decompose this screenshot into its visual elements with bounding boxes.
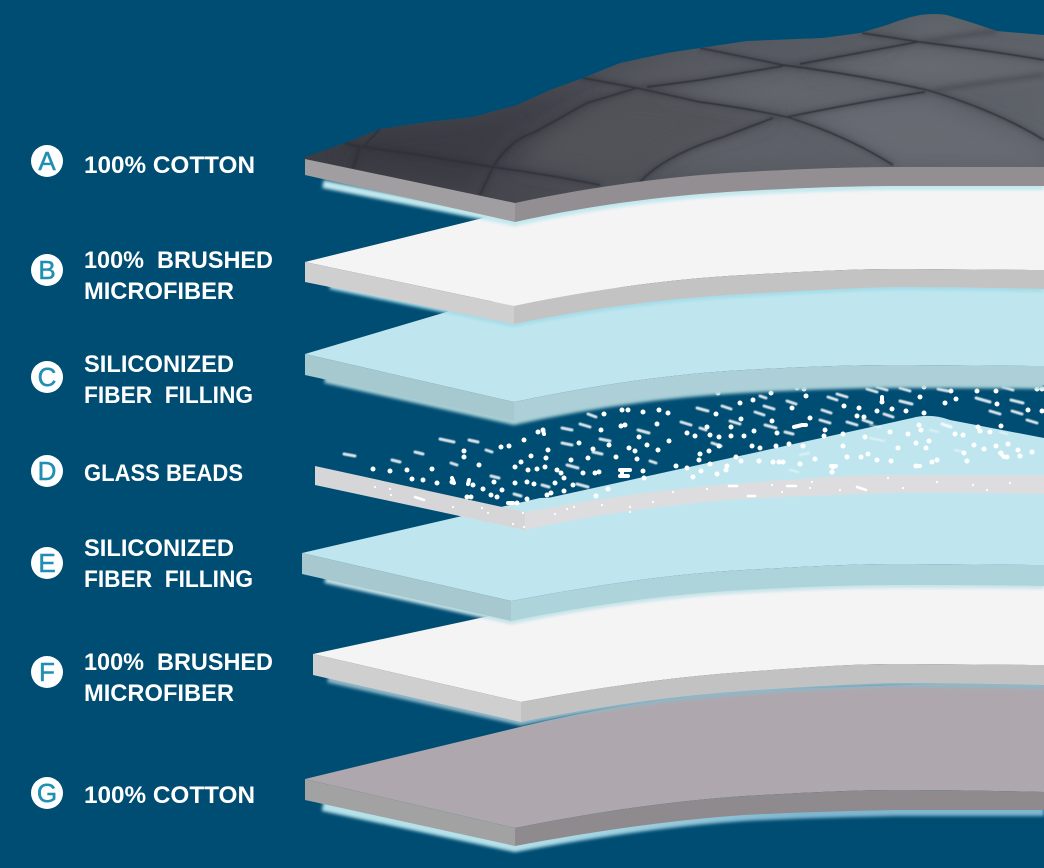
faint surface streaks [790,425,1007,472]
label B: brushed microfiber: MICROFIBER [84,278,234,305]
label F: brushed microfiber [84,649,273,707]
layer E: siliconized fiber filling [302,480,1044,621]
layer D: glass beads [315,387,1044,530]
badge D [31,455,63,487]
badge E: E [38,548,56,578]
label D: glass beads: GLASS BEADS [84,460,243,487]
badge C: C [38,362,56,392]
badge F: F [39,657,55,687]
layer B: brushed microfiber [305,175,1044,324]
badge D: D [38,456,56,486]
label E: siliconized fiber filling [84,535,253,593]
badge B: B [38,255,56,285]
quilt seams [612,29,1043,177]
layer F: brushed microfiber [313,580,1044,722]
label E: siliconized fiber filling: SILICONIZED [84,535,234,562]
badge E [31,547,63,579]
label E: siliconized fiber filling: FIBER FILLING [84,566,253,593]
label F: brushed microfiber: 100% BRUSHED [84,649,273,676]
badge A: A [38,146,56,176]
side specks [375,478,1010,527]
layer G: cotton [305,680,1044,846]
badge A [31,145,63,177]
label C: siliconized fiber filling: SILICONIZED [84,351,234,378]
label A: 100% cotton: 100% COTTON [84,152,255,179]
layer C: siliconized fiber filling [305,275,1044,421]
label F: brushed microfiber: MICROFIBER [84,680,234,707]
badge B [31,254,63,286]
badge G [31,777,63,809]
layer A: quilted cotton [300,10,1044,222]
badge F [31,656,63,688]
larger bead clusters [452,397,1004,503]
label B: brushed microfiber [84,247,273,305]
label C: siliconized fiber filling: FIBER FILLING [84,382,253,409]
quilted fabric surface [300,10,1044,210]
bead dots [373,387,1042,503]
label C: siliconized fiber filling [84,351,253,409]
label B: brushed microfiber: 100% BRUSHED [84,247,273,274]
bead streaks [344,387,1037,496]
label G: 100% cotton: 100% COTTON [84,782,255,809]
badge C [31,361,63,393]
badge G: G [37,778,57,808]
